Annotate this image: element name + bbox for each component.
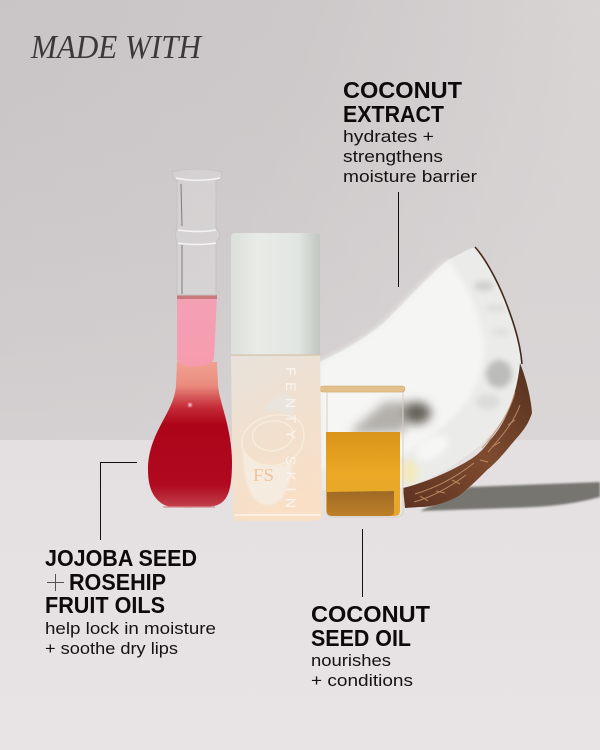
bottle logo shape: [242, 395, 304, 505]
flask liquid bulb: [148, 362, 232, 508]
callout: coconut seed oil: [311, 529, 430, 690]
shell fibres: [414, 392, 520, 502]
callout: coconut seed oil: + conditions: [311, 671, 413, 690]
callout: jojoba seed and rosehip fruit oils: [45, 462, 216, 658]
coconut inner plateau: [320, 260, 484, 470]
beaker oil: [326, 432, 400, 516]
callout: jojoba seed and rosehip fruit oils: FRUIT OILS: [45, 592, 165, 618]
bottle body: [231, 356, 322, 521]
beaker glass: [327, 392, 403, 517]
bottle cap: [231, 233, 320, 355]
coconut: [320, 247, 532, 508]
description: nourishes: [311, 651, 391, 670]
description: help lock in moisture: [45, 619, 216, 638]
Fenty Skin bottle: [231, 233, 322, 521]
callout: coconut extract: moisture barrier: [343, 167, 477, 186]
description: hydrates +: [343, 127, 434, 146]
coconut flesh: [320, 247, 522, 490]
callout: jojoba seed and rosehip fruit oils: ROSEHIP: [69, 569, 166, 595]
callout: coconut extract: EXTRACT: [343, 101, 444, 127]
cast shadow of coconut: [420, 482, 600, 511]
callout: coconut extract: strengthens: [343, 147, 443, 166]
coconut shell: [475, 247, 522, 364]
title: MADE WITH: [30, 29, 203, 66]
bottle vertical brand: FENTY SKIN: [283, 367, 299, 508]
beaker sediment: [327, 491, 394, 516]
bottle monogram: FS: [253, 465, 274, 485]
flask pink oil layer: [177, 296, 217, 367]
leader line: [398, 192, 399, 287]
callout: coconut extract: [343, 77, 477, 287]
flask glass neck: [172, 169, 222, 295]
beaker rim: [320, 386, 405, 392]
coconut seed oil beaker: [320, 386, 405, 517]
floor surface: [0, 440, 600, 750]
beaker shadow on flesh: [352, 402, 431, 434]
heading: COCONUT: [311, 601, 430, 627]
callout: coconut seed oil: SEED OIL: [311, 625, 411, 651]
heading: COCONUT: [343, 77, 462, 103]
leader line: [362, 529, 363, 597]
flask highlight: [188, 403, 192, 407]
flask of jojoba and rosehip oils: [148, 169, 232, 508]
leader line: [100, 462, 137, 540]
heading: JOJOBA SEED: [45, 545, 197, 571]
coconut rim lumps: [400, 281, 512, 484]
background wall: [0, 0, 600, 441]
callout: jojoba seed and rosehip fruit oils: + soothe dry lips: [45, 639, 178, 658]
